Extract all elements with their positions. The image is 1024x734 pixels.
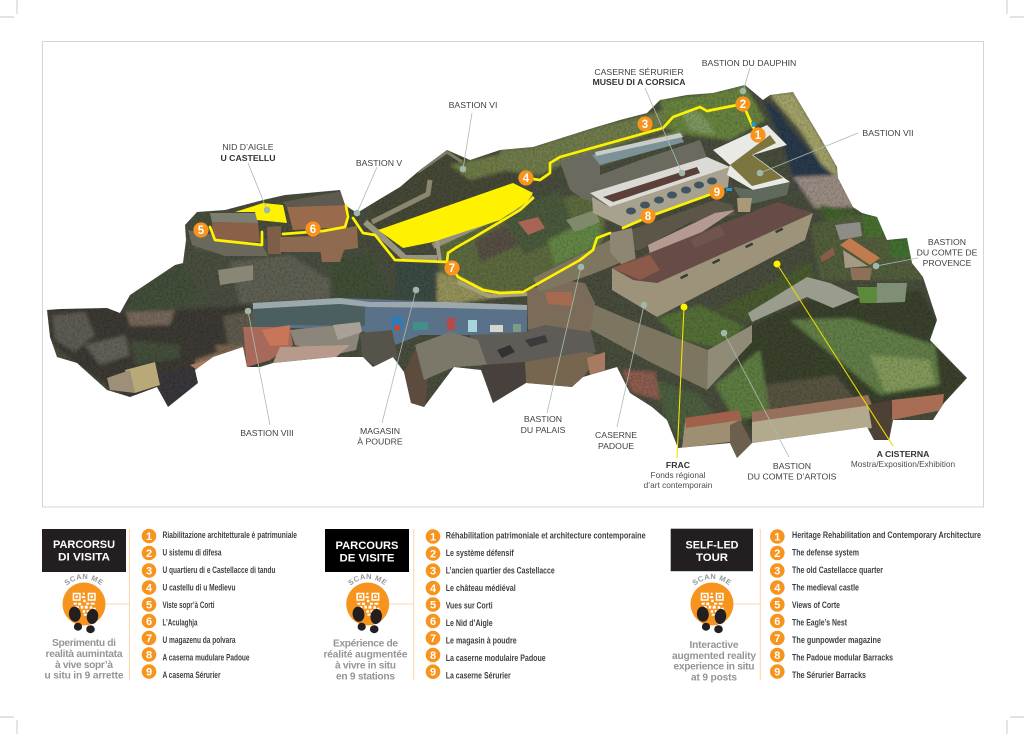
town buildings and plaza <box>107 318 605 407</box>
stop 7 <box>444 260 460 276</box>
row 2: 2 <box>146 548 152 560</box>
row 9 <box>770 664 866 681</box>
yellow zone: château courtyard <box>378 183 533 248</box>
label: Bastion du Palais: DU PALAIS <box>521 425 566 435</box>
row 2 <box>426 546 514 561</box>
label: Magasin à poudre: À POUDRE <box>357 436 403 446</box>
stop 6: 6 <box>310 224 316 236</box>
garden between barracks and lawn <box>657 305 745 348</box>
QR badge <box>690 574 734 634</box>
row 4: Le château médiéval <box>446 583 516 594</box>
castle hill rock <box>122 299 249 313</box>
wall under path 8-9 <box>625 200 735 250</box>
label: Caserne Padoue: PADOUE <box>598 441 634 451</box>
row 5 <box>142 597 214 612</box>
heading: DE VISITE <box>340 552 395 564</box>
row 9: La caserne Sérurier <box>446 670 511 682</box>
castle walls and buildings <box>188 191 358 285</box>
heading: SELF-LED <box>686 540 738 552</box>
row 6 <box>426 614 493 629</box>
connector lines <box>106 529 130 680</box>
row 1: 1 <box>430 532 436 544</box>
caption: u situ in 9 arrette <box>44 670 124 682</box>
row 4: 4 <box>146 582 153 594</box>
stop 7: 7 <box>449 263 455 275</box>
row 2: U sistemu di difesa <box>162 548 222 558</box>
row 1 <box>770 529 981 544</box>
stop 3: 3 <box>642 119 648 131</box>
label: Magasin à poudre: MAGASIN <box>360 426 400 436</box>
label: Bastion du Comte d'Artois <box>748 461 837 482</box>
map labels <box>220 58 978 490</box>
caption <box>672 640 756 684</box>
stone ramparts <box>365 152 533 296</box>
heading: DI VISITA <box>58 552 110 564</box>
row 7: Le magasin à poudre <box>446 636 517 646</box>
lower town left <box>47 300 260 410</box>
row 2 <box>770 546 859 560</box>
QR badge: SCAN ME <box>348 574 388 585</box>
row 3: 3 <box>774 566 780 578</box>
label: Bastion VII: BASTION VII <box>862 128 914 138</box>
label: Bastion du Comte d'Artois: DU COMTE D’ARTOIS <box>748 472 837 482</box>
stop 5: 5 <box>198 225 205 237</box>
stop 3 <box>637 116 653 132</box>
row 8: 8 <box>774 650 780 662</box>
row 6: 6 <box>774 616 780 628</box>
row 5: Views of Corte <box>792 600 840 611</box>
row 7: The gunpowder magazine <box>792 635 881 646</box>
row 6: 6 <box>430 616 436 628</box>
caption: réalité augmentée <box>324 650 408 660</box>
label: Bastion du Comte de Provence: DU COMTE DE <box>917 248 978 258</box>
big lawn <box>735 290 967 430</box>
row 6: The Eagle’s Nest <box>792 618 848 628</box>
bastion V and VI <box>370 150 520 235</box>
row 6 <box>770 614 848 628</box>
plaza <box>470 325 596 368</box>
row 7: 7 <box>774 633 780 645</box>
label: FRAC: d’art contemporain <box>644 480 713 490</box>
outer slope and moat <box>764 102 831 190</box>
row 7: 7 <box>146 633 152 645</box>
museum white L-shaped building with green roof <box>713 125 790 212</box>
label: Caserne Padoue: CASERNE <box>595 430 637 440</box>
row 3: 3 <box>430 566 436 578</box>
row 9: The Sérurier Barracks <box>792 670 866 681</box>
row 1: 1 <box>774 532 780 544</box>
stop list <box>142 529 297 681</box>
heading: PARCOURS <box>336 540 399 552</box>
label: A Cisterna <box>851 449 955 469</box>
row 1 <box>426 529 646 544</box>
label: Nid d'Aigle: U CASTELLU <box>220 153 276 163</box>
heading: TOUR <box>696 552 728 564</box>
row 8 <box>770 648 893 664</box>
caption: à vivre in situ <box>335 660 396 672</box>
row 4: 4 <box>774 582 781 594</box>
QR badge: SCAN ME <box>692 574 732 585</box>
row 3: The old Castellacce quarter <box>792 565 883 576</box>
slope around stop 7 <box>437 190 605 292</box>
row 4: The medieval castle <box>792 582 859 594</box>
row 6 <box>142 614 198 628</box>
row 8 <box>142 647 250 664</box>
row 3: 3 <box>146 566 152 578</box>
row 2: 2 <box>430 548 436 560</box>
row 9: 9 <box>146 666 152 678</box>
label: Bastion du Palais <box>521 414 566 435</box>
label: A Cisterna: A CISTERNA <box>877 449 930 459</box>
row 4 <box>770 580 859 595</box>
row 6: 6 <box>146 616 152 628</box>
stop 1: 1 <box>755 130 762 142</box>
QR badge: SCAN ME <box>64 574 104 585</box>
row 9: 9 <box>774 666 780 678</box>
stop 8 <box>640 208 656 224</box>
right side gardens <box>810 215 925 280</box>
row 4: 4 <box>430 583 437 595</box>
label: Nid d'Aigle <box>220 142 276 163</box>
row 9: A caserna Sérurier <box>162 670 221 681</box>
row 8: 8 <box>430 650 436 662</box>
row 1: Riabilitazione architetturale è patrimuniale <box>162 530 297 541</box>
row 8: La caserne modulaire Padoue <box>446 653 546 664</box>
label: Caserne Sérurier: CASERNE SÉRURIER <box>594 67 684 77</box>
yellow leader: FRAC <box>677 304 688 458</box>
row 7 <box>770 631 881 646</box>
leader lines and anchor dots <box>248 68 918 457</box>
blue markers near stops 1 and 9 <box>726 122 756 191</box>
heading <box>325 529 409 572</box>
map stop markers <box>193 96 766 276</box>
yellow leader: A Cisterna <box>774 260 893 446</box>
caption: realità aumintata <box>46 649 123 660</box>
label: Magasin à poudre <box>357 426 403 446</box>
row 9: 9 <box>430 667 436 679</box>
row 8: A caserna mudulare Padoue <box>162 652 250 664</box>
row 2: Le système défensif <box>446 548 514 559</box>
stop 6 <box>305 221 321 237</box>
row 4 <box>426 581 516 595</box>
caption <box>324 638 408 682</box>
row 5: 5 <box>430 600 436 612</box>
visit route <box>210 104 758 293</box>
caption: experience in situ <box>674 662 754 672</box>
label: FRAC: FRAC <box>666 460 691 470</box>
label: Caserne Sérurier <box>592 67 686 87</box>
row 2: The defense system <box>792 548 859 558</box>
row 7 <box>142 631 236 646</box>
heading <box>42 529 126 572</box>
row 8: 8 <box>146 650 152 662</box>
label: Bastion VIII: BASTION VIII <box>240 428 294 438</box>
row 5: 5 <box>774 600 780 612</box>
row 1 <box>142 529 297 543</box>
row 8: The Padoue modular Barracks <box>792 652 893 664</box>
heading: PARCORSU <box>53 539 115 551</box>
caption: Sperimentu di <box>52 638 116 649</box>
caption <box>44 638 124 682</box>
stop 4: 4 <box>523 173 530 185</box>
panel: Parcours de visite (French) <box>324 529 646 682</box>
stop 8: 8 <box>645 211 652 223</box>
row 9 <box>142 664 221 681</box>
bottom buildings <box>682 414 744 448</box>
row 4 <box>142 580 236 595</box>
stop 4 <box>518 170 534 186</box>
row 7 <box>426 631 517 646</box>
label: A Cisterna: Mostra/Exposition/Exhibition <box>851 459 955 469</box>
orange-roofed house right <box>840 238 880 265</box>
QR badge <box>346 574 390 634</box>
caption: augmented reality <box>672 651 756 662</box>
ramparts and lower barracks wall <box>527 222 944 458</box>
row 7: 7 <box>430 633 436 645</box>
stop 5 <box>193 222 209 238</box>
yellow zone: Nid d'Aigle courtyard <box>235 203 287 223</box>
caserne Sérurier and terrace <box>518 133 735 265</box>
label: Bastion V: BASTION V <box>356 158 402 168</box>
panel: Parcorsu di visita (Corsican) <box>42 528 297 682</box>
row 6: L’Aculaghja <box>162 618 198 628</box>
label: Bastion du Dauphin: BASTION DU DAUPHIN <box>702 58 796 68</box>
row 7: U magazenu da polvara <box>162 635 236 646</box>
label: Caserne Sérurier: MUSEU DI A CORSICA <box>592 77 686 87</box>
stop 2: 2 <box>740 99 746 111</box>
row 6: Le Nid d’Aigle <box>446 618 493 629</box>
row 8 <box>426 648 546 664</box>
stop list <box>770 529 981 681</box>
label: Caserne Padoue <box>595 430 637 451</box>
row 5: 5 <box>146 600 152 612</box>
row 5: Viste sopr’à Corti <box>162 600 214 611</box>
caption: Expérience de <box>333 638 398 650</box>
row 5 <box>426 597 493 612</box>
caption: à vive sopr’à <box>55 660 113 671</box>
label: Bastion du Comte d'Artois: BASTION <box>773 461 811 471</box>
caption: en 9 stations <box>336 672 395 682</box>
row 3: L’ancien quartier des Castellacce <box>446 566 555 576</box>
row 2 <box>142 546 222 560</box>
panel: Self-led tour (English) <box>670 528 981 684</box>
label: FRAC: Fonds régional <box>651 470 706 480</box>
heading <box>671 529 753 571</box>
stop 9: 9 <box>714 187 720 199</box>
terraces and ramparts above the barracks <box>500 110 665 175</box>
terrain and natural areas <box>40 80 980 470</box>
connector lines <box>734 529 760 680</box>
row 1: 1 <box>146 531 152 543</box>
caption: Interactive <box>690 640 739 651</box>
label: FRAC <box>644 460 713 490</box>
caption: at 9 posts <box>691 672 737 684</box>
row 3 <box>770 563 883 578</box>
label: Bastion VI: BASTION VI <box>449 100 497 110</box>
dark rock above the wall <box>396 263 438 299</box>
row 3: U quartieru di e Castellacce di tandu <box>162 565 276 576</box>
label: Bastion du Comte de Provence <box>917 237 978 268</box>
label: Bastion du Comte de Provence: BASTION <box>928 237 966 247</box>
row 2: 2 <box>774 548 780 560</box>
stop list <box>426 529 646 682</box>
stop 1 <box>750 127 766 143</box>
label: Nid d'Aigle: NID D’AIGLE <box>222 142 274 152</box>
row 5 <box>770 597 840 612</box>
row 1: Réhabilitation patrimoniale et architecture contemporaine <box>446 530 646 542</box>
stop 2 <box>735 96 751 112</box>
row 5: Vues sur Corti <box>446 600 493 612</box>
label: Bastion du Palais: BASTION <box>524 414 562 424</box>
connector lines <box>389 529 414 680</box>
row 9 <box>426 664 511 682</box>
stop 9 <box>709 184 725 200</box>
QR badge <box>62 574 106 634</box>
row 4: U castellu di u Medievu <box>162 582 236 594</box>
aerial view of the citadel <box>40 80 980 470</box>
row 3 <box>426 563 555 578</box>
caserne Padoue <box>612 202 835 317</box>
row 3 <box>142 563 276 578</box>
label: Bastion du Comte de Provence: PROVENCE <box>923 258 972 268</box>
blue wall with posters <box>253 298 527 346</box>
